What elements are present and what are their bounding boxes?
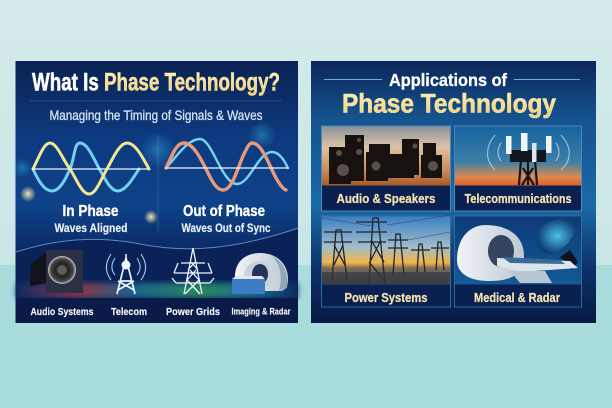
icon labels: Telecom bbox=[111, 306, 147, 318]
heading: phase technology: Phase Technology bbox=[342, 88, 556, 118]
chart: in phase waves bbox=[33, 143, 149, 194]
label: Telecommunications bbox=[464, 192, 572, 206]
icon labels bbox=[30, 306, 291, 318]
label: in phase: In Phase bbox=[62, 203, 119, 220]
icon labels: Imaging & Radar bbox=[232, 306, 291, 318]
panel: applications bbox=[311, 61, 596, 323]
subtitle: Managing the Timing of Signals & Waves bbox=[50, 107, 262, 123]
icon: speaker bbox=[30, 250, 83, 293]
decorative glows bbox=[12, 121, 276, 232]
icon labels: Power Grids bbox=[166, 306, 220, 318]
label: in phase bbox=[54, 203, 128, 235]
tower image bbox=[488, 133, 569, 185]
speakers image bbox=[329, 135, 442, 184]
ground glow strip bbox=[16, 228, 298, 323]
card: power systems bbox=[322, 215, 450, 307]
label: Medical & Radar bbox=[474, 291, 560, 305]
icon labels: Audio Systems bbox=[30, 306, 94, 318]
mri machine bbox=[457, 225, 578, 283]
card: audio and speakers bbox=[322, 126, 450, 211]
label: Audio & Speakers bbox=[336, 192, 436, 206]
chart: out of phase waves bbox=[166, 139, 288, 190]
card: medical and radar bbox=[454, 216, 582, 307]
icon: telecom tower bbox=[106, 254, 146, 294]
label: out of phase bbox=[182, 203, 271, 235]
pylons image bbox=[322, 215, 450, 283]
radar dish bbox=[536, 218, 578, 270]
heading: applications of: Applications of bbox=[389, 70, 507, 90]
label: Power Systems bbox=[344, 291, 428, 305]
panel: what is phase technology bbox=[12, 61, 298, 323]
icon: imaging machine bbox=[232, 253, 288, 294]
label: out of phase: Waves Out of Sync bbox=[182, 221, 271, 235]
label: in phase: Waves Aligned bbox=[54, 221, 128, 235]
icon: power pylon bbox=[172, 248, 214, 294]
card: telecommunications bbox=[454, 126, 582, 211]
title: What Is Phase Technology? bbox=[32, 68, 280, 96]
label: out of phase: Out of Phase bbox=[183, 203, 265, 220]
